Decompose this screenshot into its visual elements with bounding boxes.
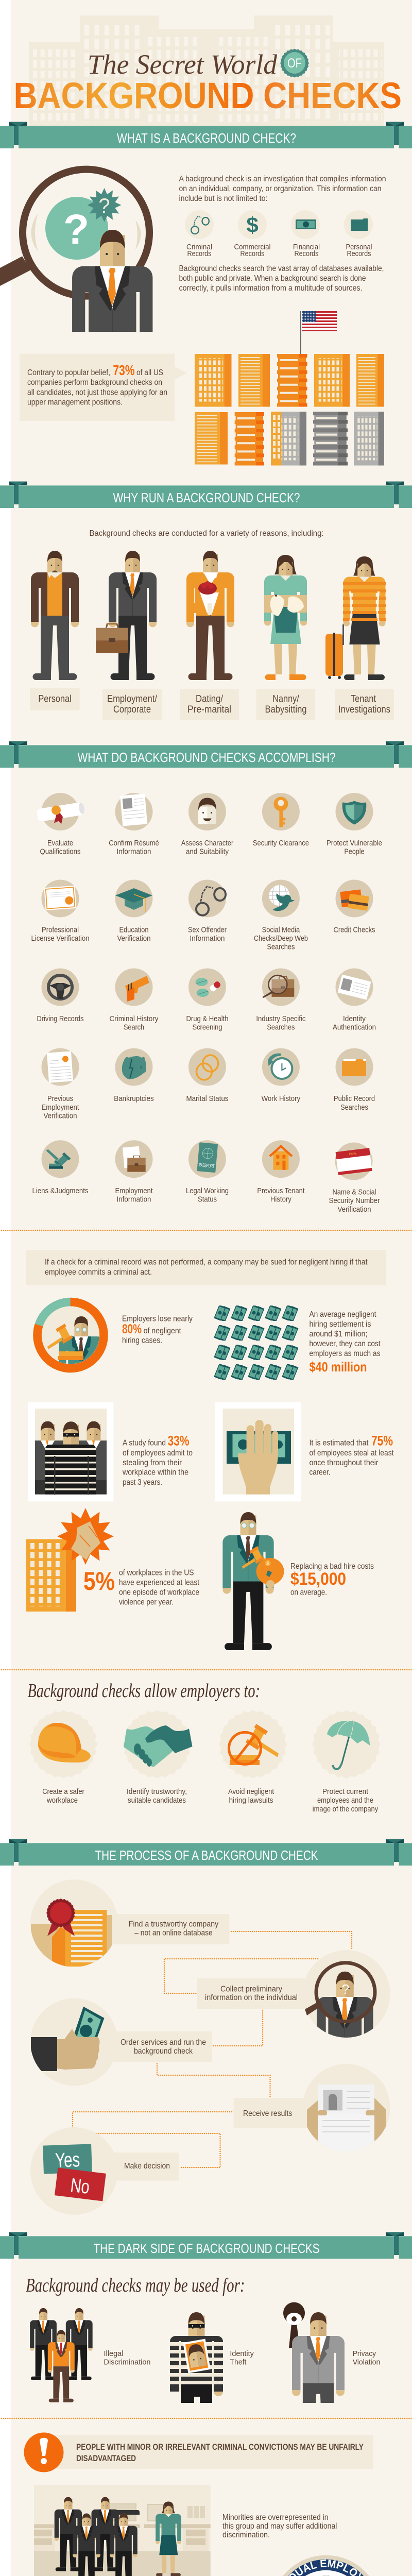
script heading: allow employers: Background checks allow employers to:	[28, 1680, 260, 1702]
card: no	[55, 2167, 106, 2201]
section heading ribbon: dark side	[0, 2232, 412, 2259]
text: replacing cost: $15,000	[290, 1569, 346, 1589]
icon grid: row 3: Driving Records	[37, 1015, 83, 1023]
alert: minor convictions	[24, 2433, 373, 2472]
record types: Records	[347, 250, 371, 258]
text: replacing cost	[290, 1562, 374, 1597]
record types: Commercial	[234, 243, 271, 251]
benefit: safer workplace: workplace	[46, 1797, 78, 1805]
record types: Financial	[293, 243, 320, 251]
process step: order services	[30, 1998, 212, 2086]
alert: minor convictions: DISADVANTAGED	[76, 2453, 136, 2463]
callout: 73 percent: all candidates, not just those applying for an	[27, 388, 167, 397]
label: employment: Employment/	[107, 694, 158, 705]
text: databases: correctly, it pulls information from a multitude of sources.	[179, 284, 363, 293]
label: dating: Dating/	[196, 694, 224, 705]
process step: collect information: information on the individual	[205, 1993, 298, 2002]
icon grid: row 2: Sex Offender	[188, 926, 227, 934]
label: nanny	[256, 689, 315, 720]
process step: collect information: Collect preliminary	[220, 1985, 282, 1994]
text: minorities: this group and may suffer additional	[222, 2522, 337, 2531]
icon: face	[188, 793, 226, 831]
text: 5 percent	[83, 1567, 200, 1606]
icon: suitcase	[325, 624, 344, 679]
icon grid: row 2: Verification	[117, 935, 150, 943]
icon: id card	[336, 969, 373, 1006]
icon grid: row 1: Security Clearance	[253, 839, 309, 848]
figure: identity theft: Theft	[230, 2359, 246, 2367]
icon: paper and briefcase	[115, 1140, 152, 1178]
icon grid: row 4: Public Record	[334, 1095, 375, 1103]
process step: collect information	[197, 1950, 390, 2038]
photo: hand on money	[215, 1402, 301, 1501]
label: employment	[102, 689, 162, 720]
figure: privacy violation: Violation	[353, 2359, 380, 2367]
label: tenant: Investigations	[338, 704, 390, 715]
icon: criminal records	[185, 210, 214, 239]
text: databases: both public and private. When a background search is done	[179, 274, 366, 283]
text: 75 percent	[309, 1433, 394, 1477]
icon grid: row 5: History	[270, 1196, 292, 1204]
icon: financial records	[291, 210, 320, 239]
icon grid: row 5: Legal Working	[186, 1187, 229, 1195]
icon grid: row 1: Evaluate	[47, 839, 73, 848]
scene: discriminating office	[34, 2485, 211, 2576]
icon grid: row 5	[32, 1140, 380, 1214]
record types: Records	[295, 250, 318, 258]
label: tenant	[335, 689, 394, 720]
icon grid: row 4: Previous	[47, 1095, 73, 1103]
callout: 73 percent: companies perform background checks on	[27, 378, 162, 387]
callout: negligent hiring	[26, 1250, 386, 1285]
process step: find a company: Find a trustworthy company	[129, 1920, 218, 1929]
icon grid: row 1: Qualifications	[40, 848, 80, 856]
magnifier with man	[0, 166, 153, 332]
section heading ribbon: what is: WHAT IS A BACKGROUND CHECK?	[117, 130, 296, 146]
icon: credit cards	[336, 880, 373, 917]
benefit: protect employees	[301, 1699, 391, 1814]
text: settlement: employers as much as	[309, 1349, 381, 1358]
card: yes: Yes	[55, 2148, 80, 2172]
callout: negligent hiring: employee commits a criminal act.	[45, 1268, 152, 1277]
process step: find a company	[30, 1879, 229, 1968]
icon grid: row 4: Employment	[41, 1104, 79, 1112]
intro text: A background check is an investigation that compiles information	[179, 175, 386, 183]
person: bad hire with piggy bank	[222, 1512, 284, 1650]
person: nanny	[264, 555, 307, 680]
text: 33 percent: past 3 years.	[123, 1478, 162, 1487]
icon grid: row 4: Work History	[262, 1095, 301, 1103]
card: yes	[43, 2144, 92, 2174]
icon: clock	[262, 1048, 300, 1086]
icon: graduation cap	[115, 880, 152, 917]
text: 5 percent: of workplaces in the US	[119, 1568, 194, 1577]
icon grid: row 1: Assess Character	[181, 839, 233, 848]
benefit: trustworthy candidates: Identify trustworthy,	[127, 1788, 187, 1796]
icon grid: row 5: Liens &Judgments	[32, 1187, 89, 1195]
text: reasons intro: Background checks are conducted for a variety of reasons, including:	[90, 529, 323, 538]
icon: pills	[188, 969, 226, 1006]
section heading ribbon: what is	[0, 122, 412, 148]
icon grid: row 5: Status	[198, 1196, 217, 1204]
section heading ribbon: dark side: THE DARK SIDE OF BACKGROUND CHECKS	[94, 2241, 319, 2256]
icon grid: row 2: Education	[119, 926, 148, 934]
icon grid: row 2: Checks/Deep Web	[254, 935, 308, 943]
label: nanny: Babysitting	[265, 704, 307, 715]
benefit: protect employees: employees and the	[317, 1797, 373, 1805]
figure: identity theft	[170, 2312, 254, 2403]
text: 33 percent: 33%	[168, 1433, 190, 1449]
text: 75 percent: once throughout their	[309, 1459, 378, 1467]
text: 80 percent: hiring cases.	[122, 1336, 162, 1345]
icon grid: money	[214, 1304, 298, 1381]
text: minorities	[222, 2513, 337, 2539]
section heading ribbon: process: THE PROCESS OF A BACKGROUND CHECK	[95, 1848, 318, 1863]
icon grid: row 3: Drug & Health	[186, 1015, 229, 1023]
person: bad hire with piggy bank: $	[266, 1561, 269, 1567]
icon grid: row 3: Criminal History	[109, 1015, 159, 1023]
process step: order services: background check	[134, 2047, 193, 2056]
card: no: No	[69, 2175, 91, 2198]
icon: key	[262, 793, 300, 831]
text: settlement	[309, 1310, 381, 1375]
icon grid: row 3: Search	[124, 1024, 144, 1032]
section heading ribbon: why run: WHY RUN A BACKGROUND CHECK?	[113, 490, 300, 505]
icon grid: row 2: Credit Checks	[334, 926, 375, 934]
person: tenant	[325, 556, 386, 680]
benefit: trustworthy candidates	[112, 1699, 202, 1805]
process step: receive results: Receive results	[243, 2109, 293, 2118]
icon grid: row 2: Searches	[267, 943, 295, 951]
text: 75 percent: 75%	[371, 1433, 393, 1449]
icon grid: row 1: People	[344, 848, 365, 856]
text: 33 percent: A study found	[123, 1439, 166, 1448]
text: databases: Background checks search the vast array of databases available,	[179, 264, 384, 273]
process step: collect information: ?	[342, 1981, 349, 1997]
icon grid: row 2: Information	[190, 935, 225, 943]
icon grid: row 5: Name & Social	[333, 1189, 376, 1197]
photo: lineup with thief	[28, 1402, 113, 1501]
icon grid: row 4: Verification	[43, 1112, 77, 1120]
title	[13, 44, 402, 116]
label: employment: Corporate	[113, 704, 151, 715]
badge: of	[276, 44, 314, 82]
section heading ribbon: process	[0, 1839, 412, 1866]
callout: 73 percent: of all US	[136, 368, 163, 377]
callout: 73 percent	[20, 353, 187, 421]
text: settlement: around $1 million;	[309, 1330, 368, 1338]
label: nanny: Nanny/	[272, 694, 299, 705]
benefit: avoid lawsuits: Avoid negligent	[228, 1788, 274, 1796]
icon grid: row 4: Searches	[340, 1104, 368, 1112]
icon grid: row 5: Information	[116, 1196, 151, 1204]
icon: resume	[115, 793, 152, 831]
label: dating: Pre-marital	[187, 704, 231, 715]
icon grid: row 4: Marital Status	[186, 1095, 229, 1103]
figure: privacy violation	[283, 2302, 380, 2460]
text: replacing cost: Replacing a bad hire costs	[290, 1562, 374, 1571]
callout: 73 percent: Contrary to popular belief,	[27, 368, 110, 377]
figure: identity theft: Identity	[230, 2350, 254, 2358]
icon grid: row 1: Confirm Résumé	[109, 839, 159, 848]
benefit: safer workplace: Create a safer	[42, 1788, 84, 1796]
text: minorities: Minorities are overrepresented in	[222, 2513, 329, 2522]
section heading ribbon: accomplish: WHAT DO BACKGROUND CHECKS ACCOMPLISH?	[77, 750, 336, 765]
text: 33 percent	[122, 1433, 193, 1487]
text: 33 percent: stealing from their	[123, 1459, 182, 1467]
record types	[185, 210, 373, 258]
icon: magnifier and briefcase	[262, 969, 300, 1006]
icon: commercial records: $	[246, 213, 259, 237]
donut chart: 80 percent	[33, 1297, 108, 1372]
icon: building with fist	[26, 1508, 114, 1612]
icon grid: row 3: Identity	[343, 1015, 366, 1023]
icon grid: row 1: Information	[116, 848, 151, 856]
icon: name tag	[335, 1143, 373, 1180]
person: employment	[96, 551, 157, 680]
icon grid: row 3: Industry Specific	[256, 1015, 305, 1023]
icon grid: row 2: License Verification	[31, 935, 90, 943]
benefit: protect employees: Protect current	[322, 1788, 368, 1796]
flowchart connectors	[73, 1931, 352, 2167]
text: 75 percent: career.	[309, 1468, 331, 1477]
icon grid: row 5: Previous Tenant	[257, 1187, 304, 1195]
benefit: avoid lawsuits: hiring lawsuits	[229, 1797, 273, 1805]
icon: wedding rings	[188, 1048, 226, 1086]
icon: diploma	[37, 793, 85, 831]
process step: make decision	[30, 2127, 179, 2215]
process step: make decision: Make decision	[124, 2162, 170, 2171]
icon: commercial records	[238, 210, 267, 239]
icon grid: row 1: Protect Vulnerable	[327, 839, 382, 848]
benefit: avoid lawsuits	[208, 1699, 298, 1805]
text: 5 percent: one episode of workplace	[119, 1588, 199, 1597]
title: The Secret World	[88, 49, 278, 80]
icon grid: row 2	[31, 880, 375, 951]
callout: negligent hiring: If a check for a criminal record was not performed, a company may be sued for negligent hiring if that	[45, 1258, 368, 1267]
text: databases	[179, 264, 384, 293]
header skyline	[29, 15, 384, 126]
icon: passport: PASSPORT	[199, 1162, 215, 1170]
text: 33 percent: workplace within the	[122, 1468, 188, 1477]
text: 80 percent: of negligent	[144, 1327, 181, 1335]
icon: personal records	[344, 210, 373, 239]
icon: social media	[262, 880, 300, 917]
badge: of: OF	[287, 56, 302, 71]
section heading ribbon: accomplish	[0, 741, 412, 768]
icon: steering wheel	[41, 969, 79, 1006]
text: 80 percent: Employers lose nearly	[122, 1315, 193, 1324]
icon: name tag: Hello,	[349, 1152, 357, 1156]
record types: Criminal	[186, 243, 212, 251]
icon grid: row 2: Professional	[42, 926, 79, 934]
icon grid: row 5: Verification	[338, 1206, 371, 1214]
text: settlement: $40 million	[309, 1359, 367, 1375]
icon grid: row 3: Searches	[267, 1024, 295, 1032]
text: 75 percent: It is estimated that	[309, 1439, 369, 1448]
process step: find a company: – not an online database	[134, 1929, 213, 1937]
group figure: illegal discrimination: Discrimination	[104, 2359, 150, 2367]
icon: passport	[188, 1140, 226, 1178]
text: 80 percent: 80%	[122, 1322, 142, 1336]
magnifier with man: ?	[98, 195, 110, 217]
icon: folder	[336, 1048, 373, 1086]
record types: Personal	[346, 243, 372, 251]
group figure: illegal discrimination: Illegal	[104, 2350, 124, 2358]
icon grid: row 4: Bankruptcies	[114, 1095, 154, 1103]
text: 75 percent: of employees steal at least	[309, 1449, 394, 1458]
intro text	[179, 175, 386, 203]
text: 33 percent: of employees admit to	[123, 1449, 193, 1458]
benefit: safer workplace	[18, 1699, 109, 1805]
magnifier with man: ?	[63, 206, 89, 253]
icon: american flag	[300, 311, 337, 354]
text: settlement: hiring settlement is	[309, 1320, 371, 1329]
icon: shield	[336, 793, 373, 831]
label: personal	[30, 688, 80, 710]
icon grid: row 5: Employment	[115, 1187, 152, 1195]
icon: house	[262, 1140, 300, 1178]
record types: Records	[187, 250, 211, 258]
text: minorities: discrimination.	[222, 2531, 270, 2539]
callout: 73 percent: 73%	[113, 362, 135, 378]
process step: order services: Order services and run the	[121, 2038, 206, 2047]
icon: handcuffs	[188, 880, 226, 917]
icon: gavel	[41, 1140, 79, 1178]
icon: broken piggy bank	[115, 1048, 152, 1086]
icon grid: row 3: Authentication	[333, 1024, 376, 1032]
icon grid: row 2: Social Media	[262, 926, 300, 934]
text: 5 percent: 5%	[83, 1567, 115, 1596]
icon grid: row 3	[37, 969, 376, 1032]
icon: gun	[115, 969, 152, 1006]
chart: buildings 73 of 100	[195, 311, 384, 466]
icon grid: row 4	[41, 1048, 375, 1120]
icon grid: row 1	[37, 793, 382, 856]
person: personal	[31, 551, 79, 680]
text: 5 percent: have experienced at least	[119, 1579, 200, 1587]
label: personal: Personal	[38, 694, 72, 705]
label: tenant: Tenant	[351, 694, 376, 705]
icon: certificate	[41, 880, 79, 917]
text: replacing cost: on average.	[290, 1588, 327, 1597]
icon: broken piggy bank: x	[140, 1065, 142, 1070]
label: dating	[180, 689, 239, 720]
benefit: trustworthy candidates: suitable candidates	[128, 1797, 186, 1805]
script heading: may be used: Background checks may be used for:	[26, 2275, 245, 2296]
text: 80 percent	[122, 1315, 193, 1345]
record types: Records	[240, 250, 265, 258]
person: dating	[186, 551, 234, 680]
text: settlement: An average negligent	[309, 1310, 376, 1319]
callout: 73 percent: upper management positions.	[27, 398, 123, 407]
benefit: protect employees: image of the company	[313, 1805, 379, 1814]
icon grid: row 3: Screening	[193, 1024, 222, 1032]
icon: employment document	[41, 1048, 79, 1086]
icon grid: row 5: Security Number	[329, 1197, 380, 1205]
text: settlement: however, they can cost	[309, 1340, 381, 1348]
section heading ribbon: why run	[0, 481, 412, 508]
intro text: include but is not limited to:	[179, 194, 268, 203]
group figure: illegal discrimination	[30, 2308, 150, 2402]
figure: privacy violation: Privacy	[353, 2350, 376, 2358]
icon grid: row 1: and Suitability	[186, 848, 229, 856]
intro text: on an individual, company, or organization. This information can	[179, 184, 381, 193]
text: 5 percent: violence per year.	[119, 1598, 174, 1606]
process step: receive results	[234, 2064, 390, 2154]
